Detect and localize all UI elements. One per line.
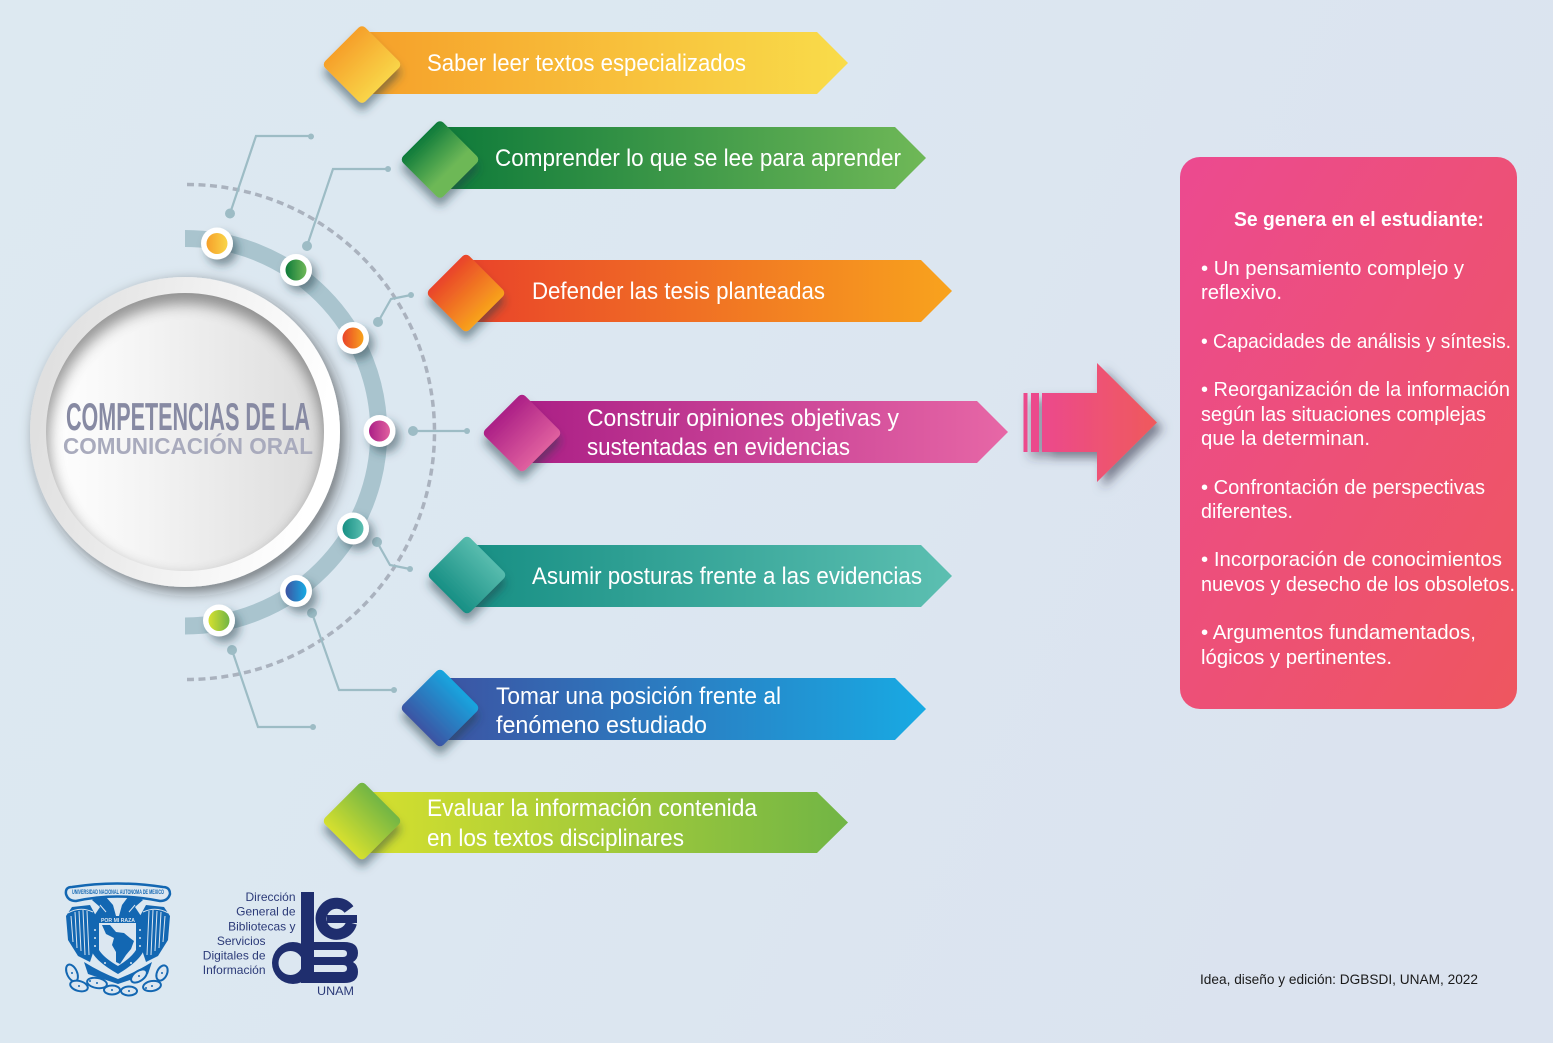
logo text: DGBSDI name: Información: [203, 963, 266, 977]
banner: evaluar: [322, 781, 848, 861]
panel list: • Un pensamiento complejo y: [1201, 258, 1464, 280]
panel list: que la determinan.: [1201, 428, 1370, 450]
emblem shield: [92, 916, 143, 974]
ring nodes: [201, 228, 396, 636]
panel list: reflexivo.: [1201, 282, 1282, 304]
title: COMPETENCIAS DE LA: [66, 396, 310, 439]
banner: evaluar: Evaluar la información contenida: [427, 795, 758, 822]
logo text: DGBSDI name: Servicios: [217, 934, 266, 948]
banner: tomar: Tomar una posición frente al: [496, 683, 781, 710]
banner: defender: [426, 253, 952, 333]
logo: UNAM emblem: [64, 884, 170, 996]
panel list: • Capacidades de análisis y síntesis.: [1201, 331, 1511, 353]
logo text: DGBSDI name: Bibliotecas y: [228, 920, 296, 934]
emblem banner: UNIVERSIDAD NACIONAL AUTONOMA DE MEXICO: [72, 889, 164, 896]
panel list: • Reorganización de la información: [1201, 379, 1510, 401]
panel heading: Se genera en el estudiante:: [1234, 209, 1484, 231]
panel list: • Argumentos fundamentados,: [1201, 622, 1476, 644]
banner: saber leer: Saber leer textos especializados: [427, 50, 746, 77]
banner: construir: sustentadas en evidencias: [587, 434, 850, 461]
panel list: según las situaciones complejas: [1201, 404, 1486, 426]
panel list: lógicos y pertinentes.: [1201, 647, 1392, 669]
banner: saber leer: [322, 24, 848, 105]
banner: construir: Construir opiniones objetivas y: [587, 405, 899, 432]
emblem birds: [92, 896, 116, 916]
panel list: diferentes.: [1201, 501, 1293, 523]
panel list: • Incorporación de conocimientos: [1201, 549, 1502, 571]
banner: asumir: [427, 535, 952, 615]
banner: evaluar: en los textos disciplinares: [427, 825, 684, 852]
banner: asumir: Asumir posturas frente a las evidencias: [532, 563, 922, 590]
ring connectors: [225, 134, 470, 730]
central circle: [25, 272, 355, 602]
banner: comprender: Comprender lo que se lee para aprender: [495, 145, 901, 172]
credit: Idea, diseño y edición: DGBSDI, UNAM, 2022: [1200, 971, 1478, 987]
banner: tomar: fenómeno estudiado: [496, 712, 707, 739]
logo text: DGBSDI name: [203, 890, 296, 977]
panel list: nuevos y desecho de los obsoletos.: [1201, 574, 1515, 596]
logo text: DGBSDI name: Dirección: [245, 890, 296, 904]
banner: construir: [482, 393, 1008, 473]
panel list: [1201, 258, 1515, 669]
panel list: • Confrontación de perspectivas: [1201, 477, 1485, 499]
banner: tomar: [400, 668, 926, 748]
logo: UNAM emblem: POR MI RAZA: [101, 918, 135, 924]
banner: comprender: [400, 119, 926, 200]
logo text: DGBSDI name: Digitales de: [203, 948, 266, 962]
banner: defender: Defender las tesis planteadas: [532, 278, 825, 305]
subtitle: COMUNICACIÓN ORAL: [63, 432, 313, 459]
arrow: [1024, 363, 1157, 482]
logo label: UNAM: [317, 984, 354, 998]
ring arc: [185, 238, 379, 626]
dashed arc: [187, 184, 435, 680]
emblem cacti: [64, 962, 170, 996]
logo text: DGBSDI name: General de: [236, 904, 296, 918]
logo: DGB monogram: [272, 892, 358, 998]
panel: se genera en el estudiante: [1180, 157, 1517, 709]
